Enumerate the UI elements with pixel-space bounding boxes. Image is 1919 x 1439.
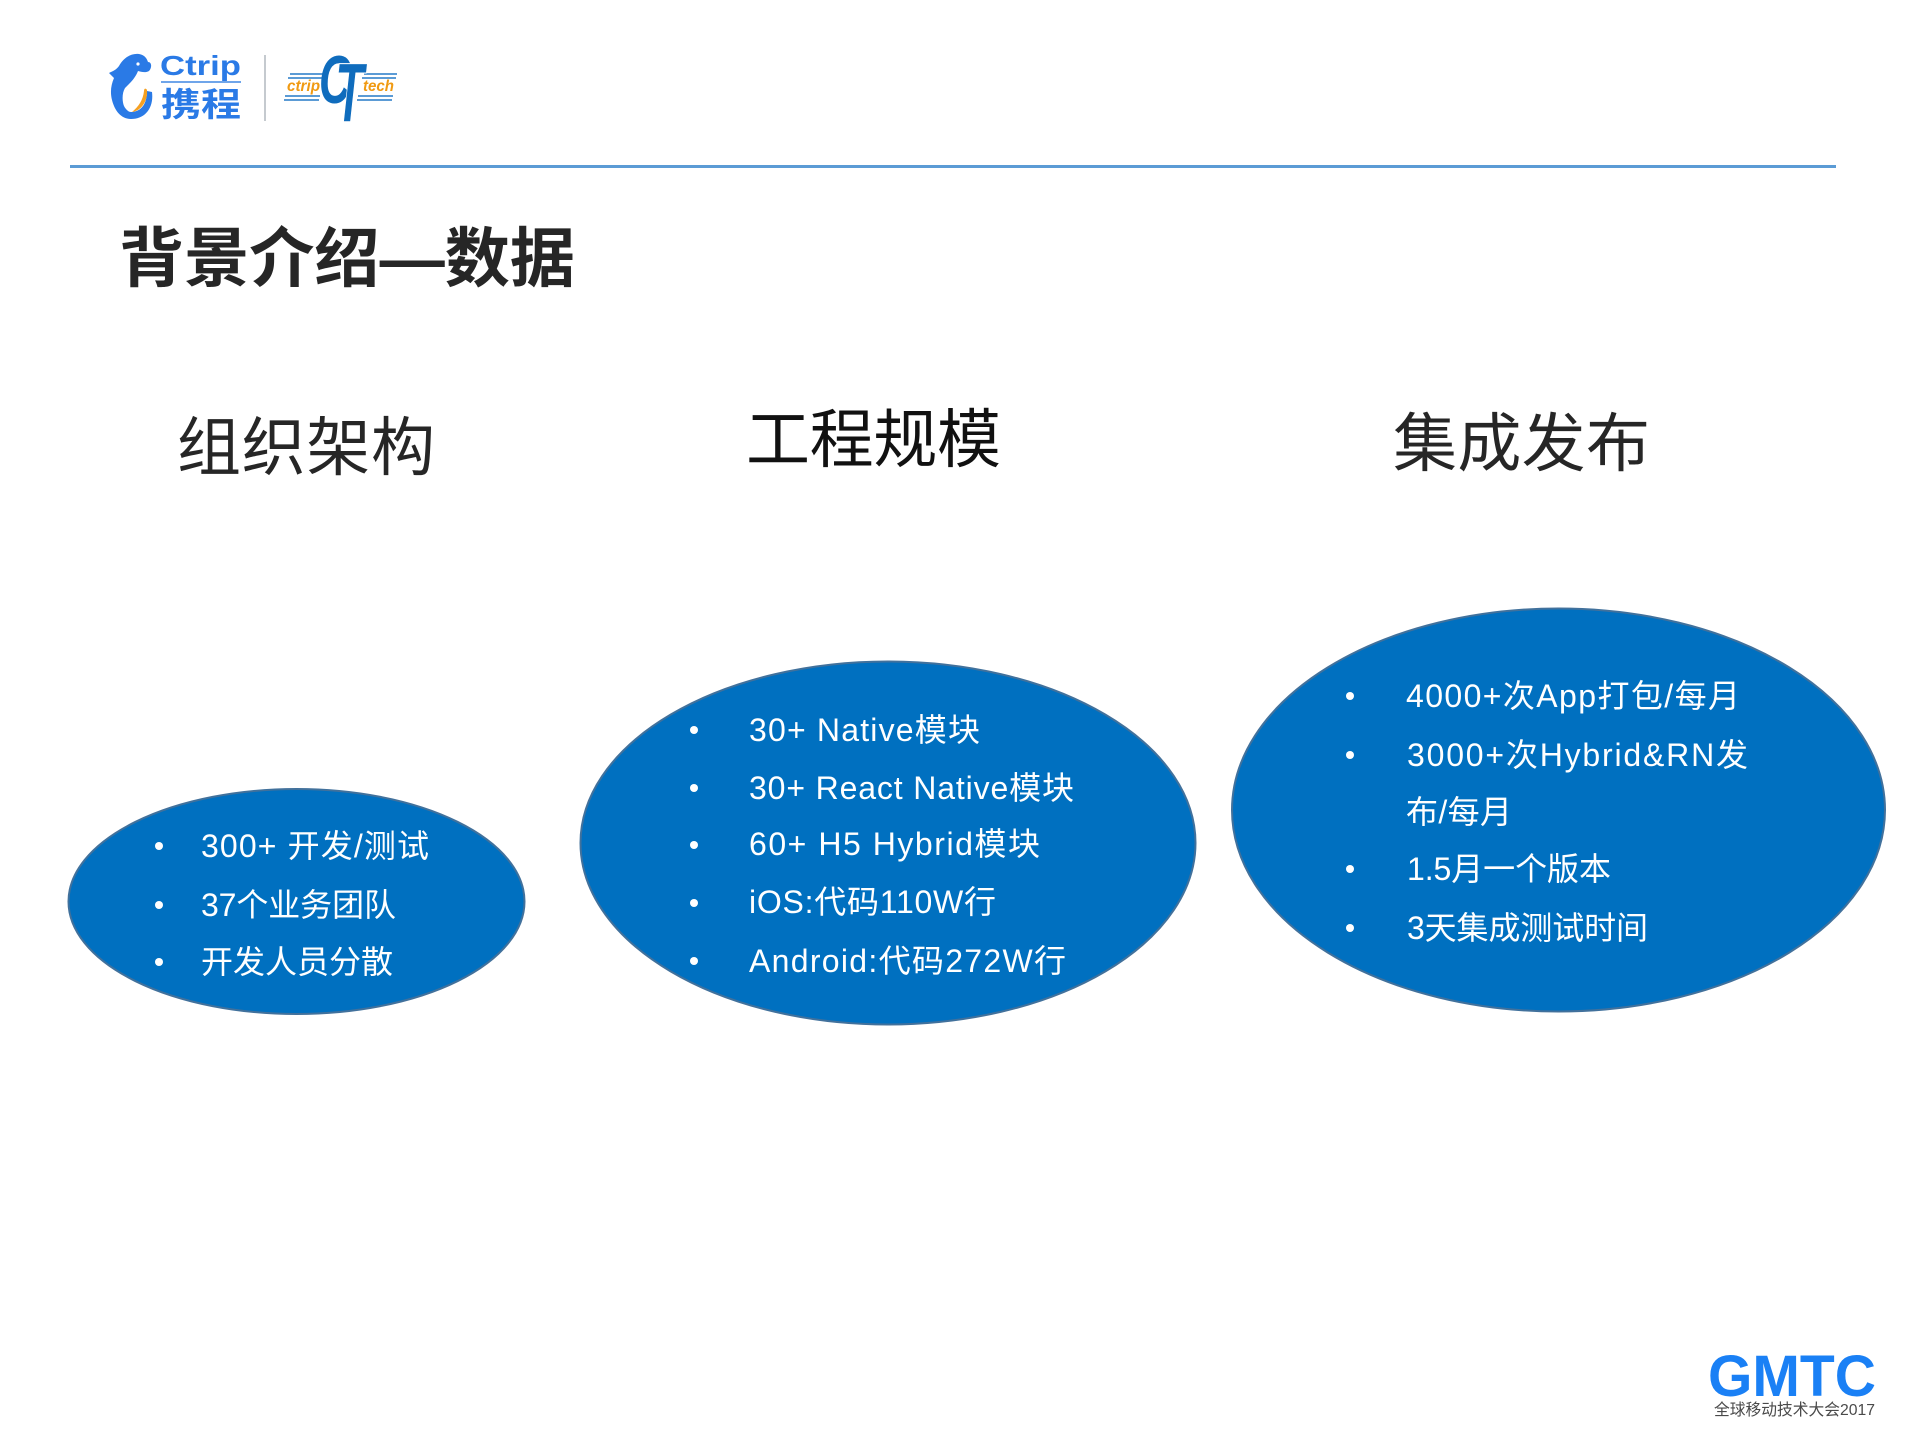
bullet list: 30+ Native模块: [749, 712, 980, 748]
logo: ctrip tech: [284, 42, 397, 140]
heading: 工程规模: 工程规模: [746, 404, 1001, 476]
bullet list: iOS:代码110W行: [749, 884, 996, 920]
logo text: T: T: [335, 46, 368, 140]
bullet list: 布/每月: [1406, 794, 1512, 830]
logo: Ctrip: [109, 50, 241, 123]
logo wordmark: GMTC: GMTC: [1708, 1344, 1876, 1409]
bullet list: 3天集成测试时间: [1407, 910, 1648, 946]
bullet list: [690, 712, 1074, 979]
bullet list: 开发人员分散: [201, 944, 393, 980]
bullet list: 3000+次Hybrid&RN发: [1407, 737, 1748, 773]
logo subtitle: 全球移动技术大会2017: [1714, 1401, 1875, 1419]
bullet list: [155, 828, 429, 980]
bullet list: 37个业务团队: [201, 887, 396, 923]
panel: 工程规模 ellipse: [580, 662, 1196, 1024]
icon: dolphin: [109, 54, 152, 119]
bullet list: [1346, 678, 1748, 946]
bullet list: 300+ 开发/测试: [201, 828, 429, 864]
panel: 组织架构 ellipse: [68, 789, 524, 1014]
logo wordmark: Ctrip: Ctrip: [160, 50, 241, 81]
logo wordmark: 携程: 携程: [161, 86, 241, 123]
bullet list: 4000+次App打包/每月: [1406, 678, 1740, 714]
logo: GMTC: [1708, 1344, 1876, 1419]
bullet list: Android:代码272W行: [749, 943, 1066, 979]
bullet list: 1.5月一个版本: [1407, 851, 1611, 887]
bullet list: 60+ H5 Hybrid模块: [749, 826, 1040, 862]
logo text: tech: tech: [363, 78, 394, 95]
logo text: C: C: [319, 42, 352, 118]
panel: 集成发布 ellipse: [1232, 608, 1885, 1012]
heading: 组织架构: 组织架构: [177, 412, 435, 484]
bullet list: 30+ React Native模块: [749, 770, 1074, 806]
logo text: ctrip: ctrip: [287, 78, 320, 95]
heading: 集成发布: 集成发布: [1393, 408, 1650, 480]
title: 背景介绍—数据: [119, 222, 575, 295]
header rule: [70, 165, 1836, 168]
logo divider: [264, 55, 266, 121]
